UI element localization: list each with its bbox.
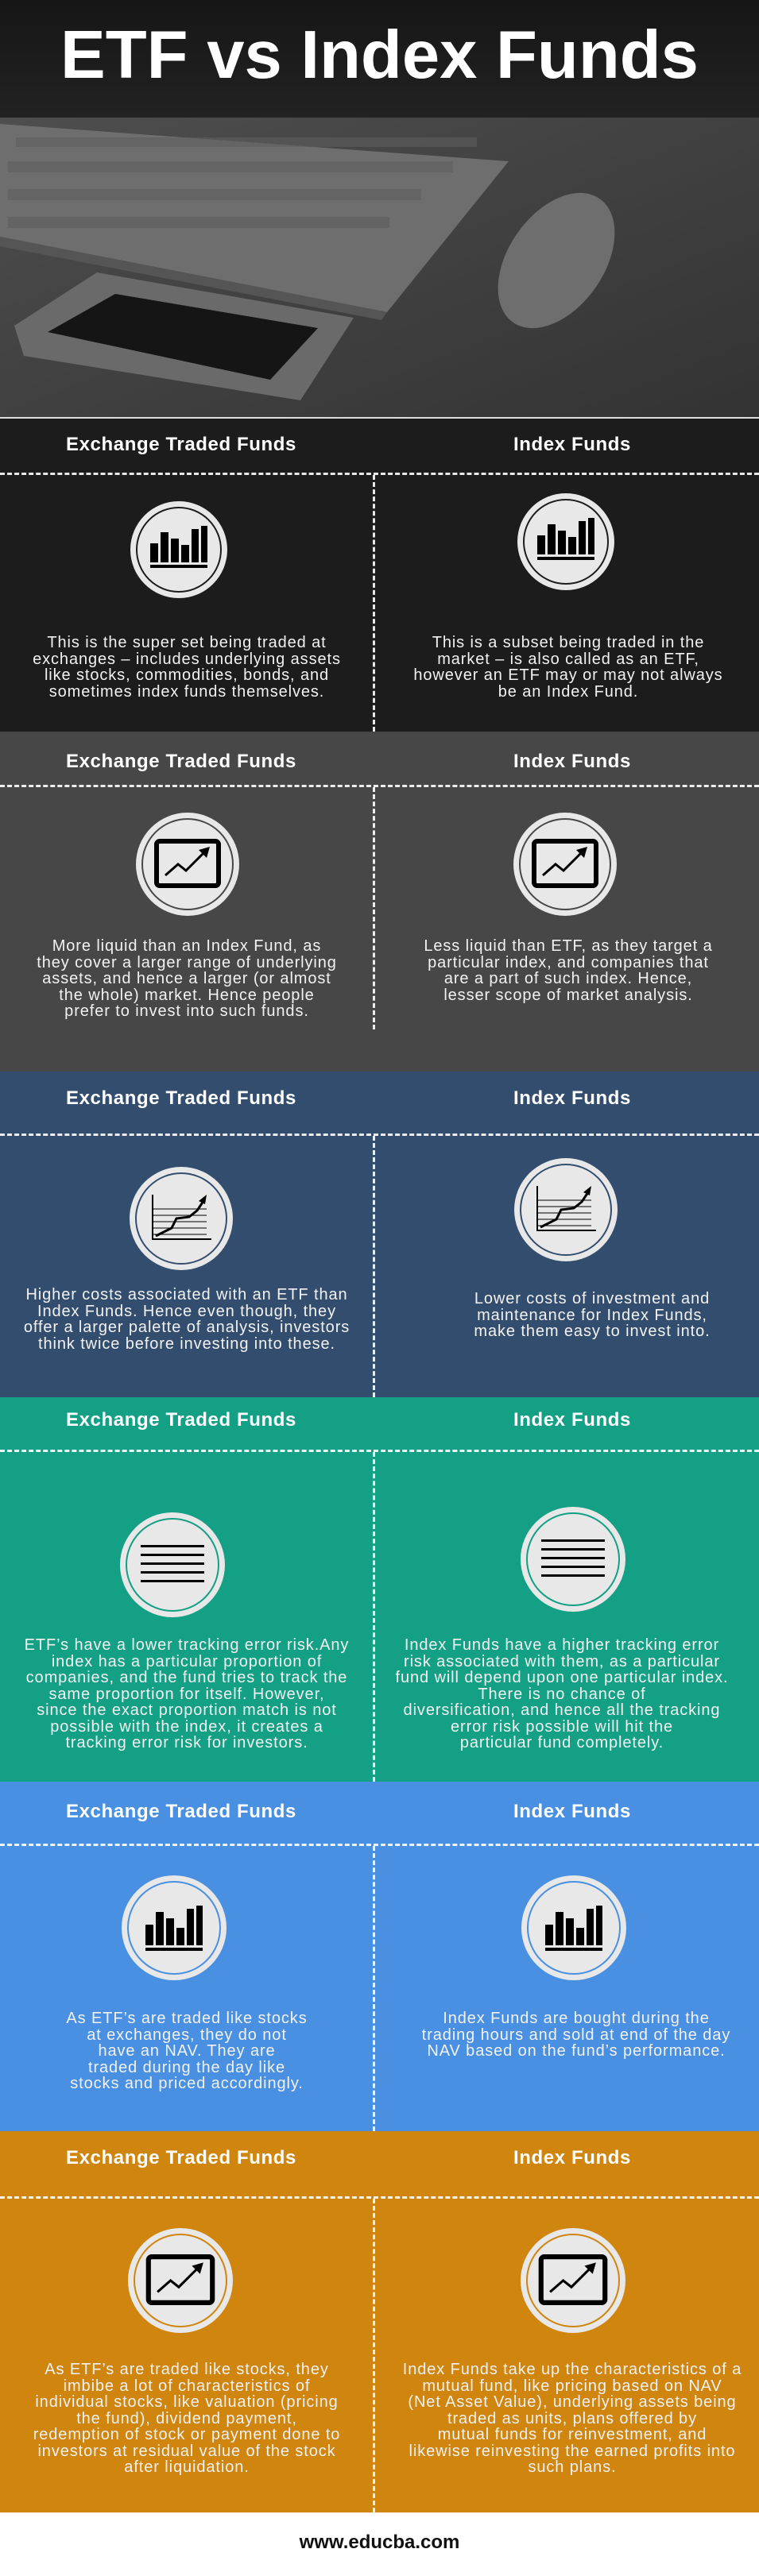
title band	[0, 0, 759, 118]
text: ETF: have an NAV. They are	[98, 2042, 276, 2060]
heading: ETF: Exchange Traded Funds	[66, 434, 296, 455]
text: ETF: Index Funds. Hence even though, they	[37, 1303, 336, 1320]
text: ETF	[33, 634, 341, 701]
text: Index: however an ETF may or may not always	[413, 666, 723, 684]
text: ETF: More liquid than an Index Fund, as	[52, 937, 321, 955]
text: ETF: at exchanges, they do not	[87, 2026, 287, 2043]
text: Index: Less liquid than ETF, as they target a	[424, 937, 713, 955]
text: Index: This is a subset being traded in the	[432, 634, 704, 651]
text: Index	[474, 1290, 711, 1340]
text: ETF: index has a particular proportion of	[52, 1652, 322, 1670]
text: ETF	[24, 1286, 350, 1352]
text: ETF: prefer to invest into such funds.	[64, 1002, 309, 1020]
text: Index: fund will depend upon one particular index.	[396, 1669, 728, 1686]
heading: Index: Index Funds	[513, 1409, 631, 1431]
text: ETF: since the exact proportion match is not	[37, 1701, 337, 1719]
text: Index: error risk possible will hit the	[451, 1717, 673, 1735]
text: Index: NAV based on the fund’s performance.	[427, 2042, 726, 2060]
text: ETF: tracking error risk for investors.	[65, 1734, 308, 1751]
text: ETF: traded during the day like	[88, 2059, 285, 2076]
text: ETF: redemption of stock or payment done to	[33, 2426, 340, 2443]
icon: trend frame ETF	[136, 813, 239, 916]
text: ETF: like stocks, commodities, bonds, and	[45, 666, 329, 684]
heading: ETF: Exchange Traded Funds	[66, 1087, 296, 1109]
text: ETF	[37, 937, 337, 1020]
text: Index: Index Funds are bought during the	[443, 2010, 710, 2027]
text: Index: likewise reinvesting the earned profits into	[409, 2442, 735, 2459]
icon: bar chart ETF	[122, 1875, 227, 1980]
panel: section 2	[0, 732, 759, 1072]
text: ETF: individual stocks, like valuation (pricing	[35, 2393, 339, 2411]
panel: section 6	[0, 2131, 759, 2512]
icon: lines Index	[521, 1507, 625, 1612]
text: Index: are a part of such index. Hence,	[444, 970, 692, 987]
text: Index: be an Index Fund.	[498, 683, 638, 701]
heading: Index: Index Funds	[513, 751, 631, 772]
text: Index	[403, 2361, 742, 2476]
text: ETF: companies, and the fund tries to track the	[26, 1669, 347, 1686]
text: Index	[424, 937, 713, 1004]
heading: ETF: Exchange Traded Funds	[66, 2147, 296, 2169]
text: Index	[422, 2010, 730, 2060]
icon: trend frame ETF	[128, 2228, 233, 2333]
text: ETF: offer a larger palette of analysis, investors	[24, 1319, 350, 1336]
text: ETF: Higher costs associated with an ETF than	[25, 1286, 348, 1303]
heading: Index: Index Funds	[513, 1801, 631, 1822]
panel: section 1	[0, 419, 759, 732]
text: ETF: This is the super set being traded at	[47, 634, 327, 651]
text: Index: market – is also called as an ETF,	[437, 650, 699, 667]
icon: lines ETF	[120, 1512, 225, 1617]
text: Index: Lower costs of investment and	[474, 1290, 710, 1307]
text: Index: particular fund completely.	[460, 1734, 664, 1751]
text: ETF: investors at residual value of the stock	[37, 2442, 336, 2459]
text: ETF: ETF’s have a lower tracking error risk.Any	[25, 1636, 349, 1654]
text: Index: Index Funds take up the characteristics of a	[403, 2361, 742, 2378]
text: Index: diversification, and hence all the tracking	[404, 1701, 720, 1719]
heading: ETF: Exchange Traded Funds	[66, 1801, 296, 1822]
text: ETF: exchanges – includes underlying assets	[33, 650, 341, 667]
text: Index: Index Funds have a higher tracking error	[405, 1636, 719, 1654]
text: ETF: they cover a larger range of underlying	[37, 953, 337, 971]
icon: bar chart Index	[517, 493, 614, 590]
heading: Index: Index Funds	[513, 1087, 631, 1109]
photo: keyboard, phone and mouse	[0, 118, 759, 417]
heading: Index: Index Funds	[513, 434, 631, 455]
text: Index	[396, 1636, 728, 1751]
heading: ETF: Exchange Traded Funds	[66, 1409, 296, 1431]
icon: trend frame Index	[513, 813, 617, 916]
panel: section 3	[0, 1072, 759, 1397]
icon: bar chart ETF	[130, 501, 227, 598]
text: Index: traded as units, plans offered by	[447, 2410, 697, 2427]
text: Index: mutual funds for reinvestment, and	[438, 2426, 707, 2443]
text: Index: make them easy to invest into.	[474, 1323, 711, 1340]
text: ETF: possible with the index, it creates a	[50, 1717, 323, 1735]
text: ETF: imbibe a lot of characteristics of	[64, 2377, 310, 2394]
text: ETF: after liquidation.	[124, 2458, 250, 2476]
text: ETF: stocks and priced accordingly.	[70, 2075, 304, 2092]
text: ETF: same proportion for itself. However,	[49, 1686, 324, 1703]
text: ETF	[25, 1636, 349, 1751]
text: Index: There is no chance of	[478, 1686, 646, 1703]
text: ETF	[66, 2010, 308, 2092]
text: Index: trading hours and sold at end of the day	[422, 2026, 730, 2043]
text: ETF: As ETF’s are traded like stocks	[66, 2010, 308, 2027]
text: Index: mutual fund, like pricing based on NAV	[422, 2377, 722, 2394]
icon: line chart Index	[514, 1158, 618, 1261]
text: Index	[413, 634, 723, 701]
heading: ETF: Exchange Traded Funds	[66, 751, 296, 772]
text: Index: risk associated with them, as a particular	[404, 1652, 720, 1670]
text: Index: lesser scope of market analysis.	[443, 987, 693, 1004]
text: ETF: sometimes index funds themselves.	[49, 683, 324, 701]
panel: section 4	[0, 1397, 759, 1782]
heading: Index: Index Funds	[513, 2147, 631, 2169]
text: ETF: the fund), dividend payment,	[76, 2410, 297, 2427]
text: ETF: think twice before investing into these.	[38, 1334, 335, 1352]
text: ETF: As ETF’s are traded like stocks, they	[45, 2361, 329, 2378]
text: ETF: assets, and hence a larger (or almost	[42, 970, 331, 987]
title: ETF vs Index Funds	[60, 17, 699, 93]
panel: section 5	[0, 1782, 759, 2131]
text: Index: (Net Asset Value), underlying assets being	[408, 2393, 737, 2411]
icon: trend frame Index	[521, 2228, 625, 2333]
text: Index: such plans.	[528, 2458, 617, 2476]
icon: line chart ETF	[130, 1167, 233, 1270]
icon: bar chart Index	[521, 1875, 626, 1980]
footer: website: www.educba.com	[300, 2532, 459, 2553]
text: Index: particular index, and companies that	[428, 953, 709, 971]
text: Index: maintenance for Index Funds,	[477, 1306, 707, 1323]
text: ETF	[33, 2361, 340, 2476]
text: ETF: the whole) market. Hence people	[59, 987, 315, 1004]
